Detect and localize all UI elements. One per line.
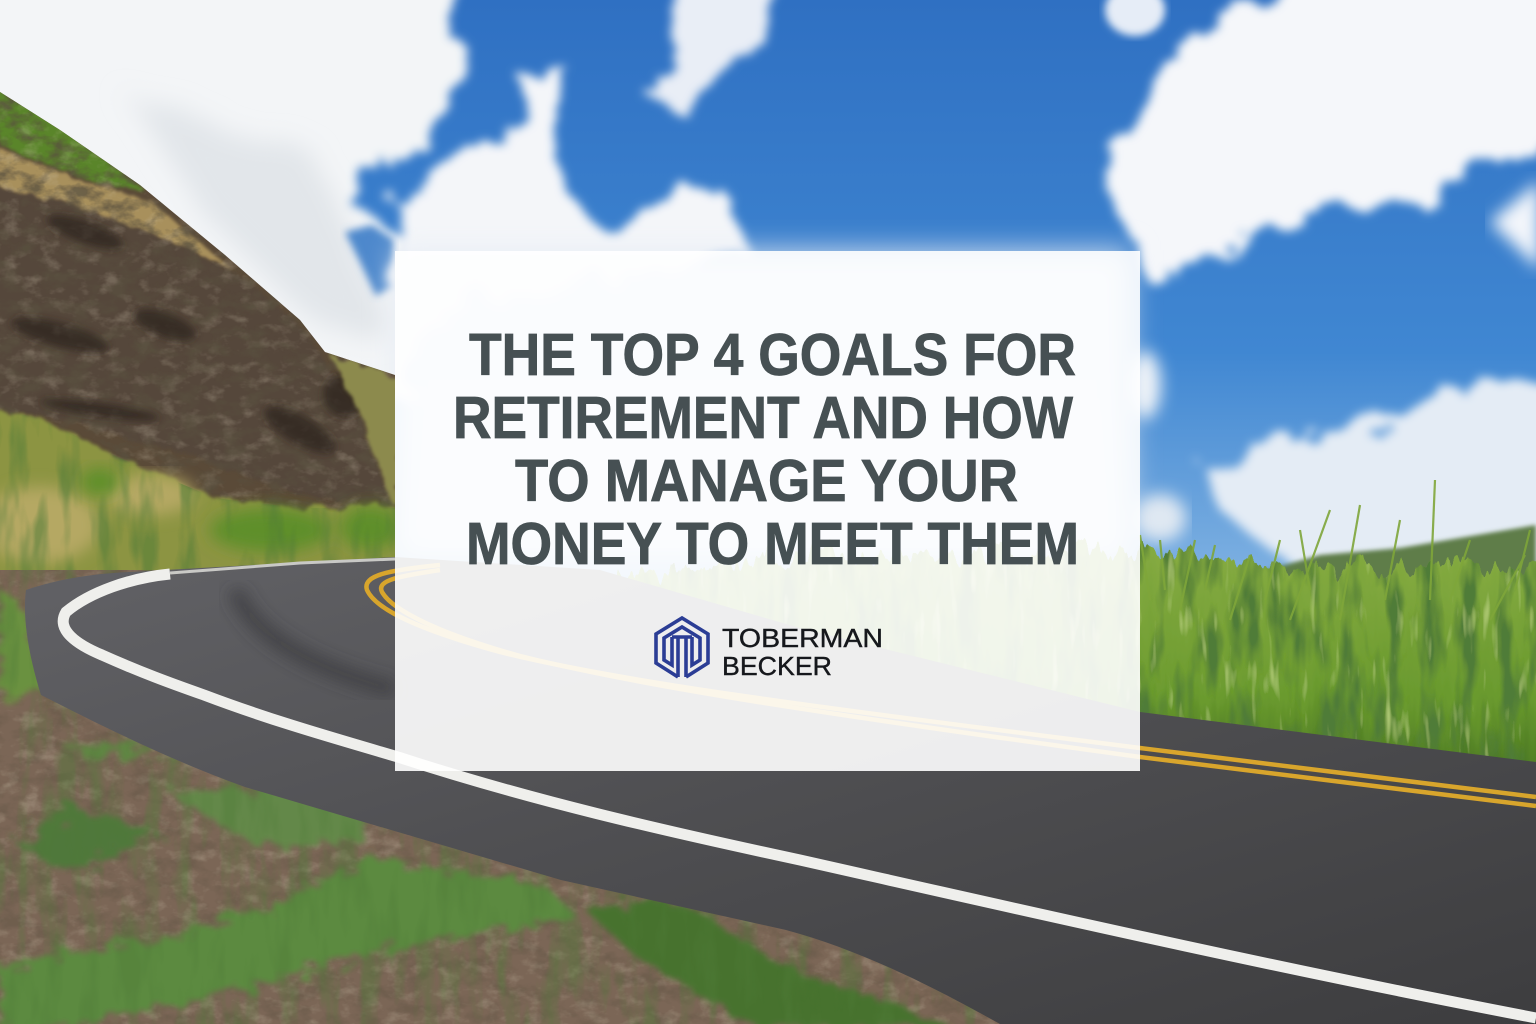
cloud: behind panel [395,250,1130,560]
road [25,557,1536,1024]
cloud: upper left mass [0,0,462,400]
translucent title panel [395,251,1140,771]
cloud: right of panel [1129,351,1186,542]
hill: dry grass band [0,145,230,268]
road: faint thin edge line [170,559,395,573]
grass mass [560,548,1536,820]
hill: green cap [0,85,145,190]
photo background: sky [0,0,1536,640]
ground on lower left [0,570,1000,1024]
logo wordmark: Becker: BECKER [722,651,832,681]
hill on left [0,85,400,600]
title line 4: MONEY TO MEET THEM [466,511,1079,577]
cloud: large right [1095,0,1536,280]
road: skid shading [235,590,395,690]
road: white edge line [63,574,1536,1018]
ground: grass patches [0,592,960,1024]
far hill [1250,525,1536,620]
sky gap: blue hole in cloud [345,225,394,296]
title [453,322,1079,577]
title line 1: THE TOP 4 GOALS FOR [469,322,1076,388]
cloud: shaded base near hill [130,100,395,340]
title line 2: RETIREMENT AND HOW [453,385,1073,451]
cloud: top center [640,0,772,112]
hill: rock face [0,184,217,264]
title line 3: TO MANAGE YOUR [515,448,1018,514]
cloud: top small [1105,0,1165,36]
icon: hexagon mark [656,618,708,677]
hill: right slope grass [330,355,400,505]
photo background: clouds [0,0,1536,570]
hill: lower grass [0,408,395,570]
logo wordmark: Toberman: TOBERMAN [722,623,883,653]
right grass field [560,480,1536,820]
cloud: center billow [400,70,752,320]
cloud: lower right [1195,370,1536,570]
road: double yellow line [366,565,1536,806]
cloud: far right wisp [1490,180,1536,270]
hill: rock texture [0,85,400,515]
logo [656,618,883,681]
grass blades [1140,480,1530,620]
hill: rock shadows [9,208,367,462]
